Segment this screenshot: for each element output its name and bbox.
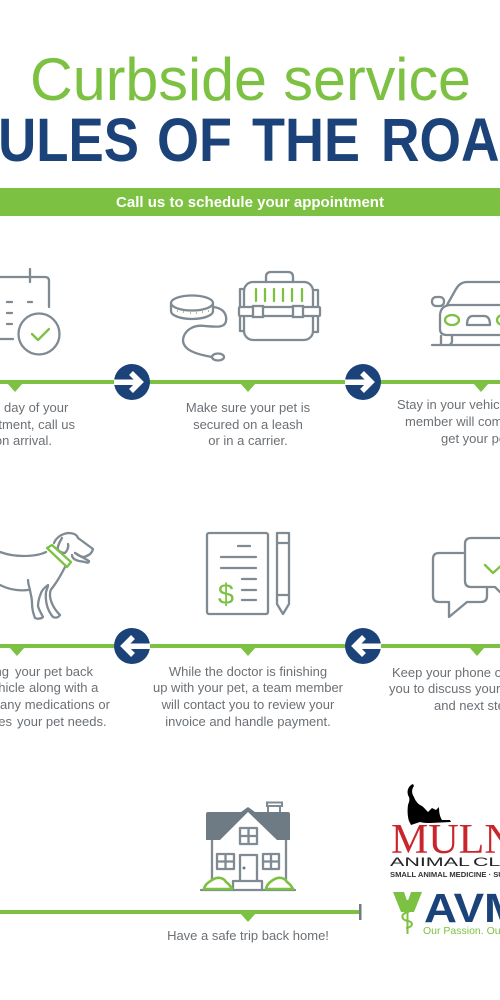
icon: car bbox=[432, 282, 500, 345]
icon: house bbox=[201, 802, 295, 890]
title: Rules of the Road: THE bbox=[252, 106, 360, 174]
text: step 5: will contact you to review your bbox=[161, 697, 335, 712]
timeline: row 2 bbox=[0, 628, 500, 664]
banner: schedule appointment bbox=[0, 188, 500, 216]
text: step 2: Make sure your pet is bbox=[186, 400, 311, 415]
icon: chat bubbles bbox=[433, 538, 500, 617]
icon: dog with collar bbox=[0, 533, 93, 619]
banner: schedule appointment: Call us to schedule your appointment bbox=[116, 195, 384, 211]
timeline: final step bbox=[0, 904, 362, 922]
text: step 2: secured on a leash bbox=[193, 417, 303, 432]
text: step 2 bbox=[186, 400, 311, 448]
logo: Mulnix Animal Clinic bbox=[390, 784, 500, 879]
text: step 1 bbox=[0, 400, 75, 448]
text: step 5: up with your pet, a team member bbox=[153, 680, 344, 695]
text: step 5: invoice and handle payment. bbox=[165, 714, 331, 729]
text: step 6: your pet back bbox=[15, 664, 94, 679]
title: Rules of the Road: OF bbox=[157, 106, 232, 174]
text: safe trip home: Have a safe trip back home! bbox=[167, 928, 329, 943]
text: step 6: any medications or bbox=[0, 697, 111, 712]
icon: pet carrier bbox=[239, 272, 320, 340]
icon: invoice and pencil bbox=[207, 533, 289, 614]
text: step 5: While the doctor is finishing bbox=[169, 664, 327, 679]
logo: AVMA bbox=[393, 885, 500, 937]
title: Rules of the Road bbox=[0, 106, 500, 174]
text: step 6: your pet needs. bbox=[17, 714, 107, 729]
text: step 1: day of your bbox=[4, 400, 69, 415]
text: step 4 bbox=[389, 665, 500, 713]
icon: calendar with check bbox=[0, 269, 60, 354]
timeline: row 1 bbox=[0, 364, 500, 400]
title: Curbside service: Curbside service bbox=[30, 46, 471, 113]
text: step 6 bbox=[0, 664, 111, 729]
text: step 5 bbox=[153, 664, 344, 729]
text: step 3 bbox=[397, 397, 500, 446]
text: step 6: along with a bbox=[29, 680, 99, 695]
icon: invoice and pencil: $ bbox=[218, 579, 234, 611]
icon: black cat bbox=[408, 784, 451, 825]
icon: collar and leash bbox=[171, 296, 226, 360]
logo: Mulnix Animal Clinic: ANIMAL bbox=[390, 855, 471, 869]
text: step 2: or in a carrier. bbox=[208, 433, 288, 448]
